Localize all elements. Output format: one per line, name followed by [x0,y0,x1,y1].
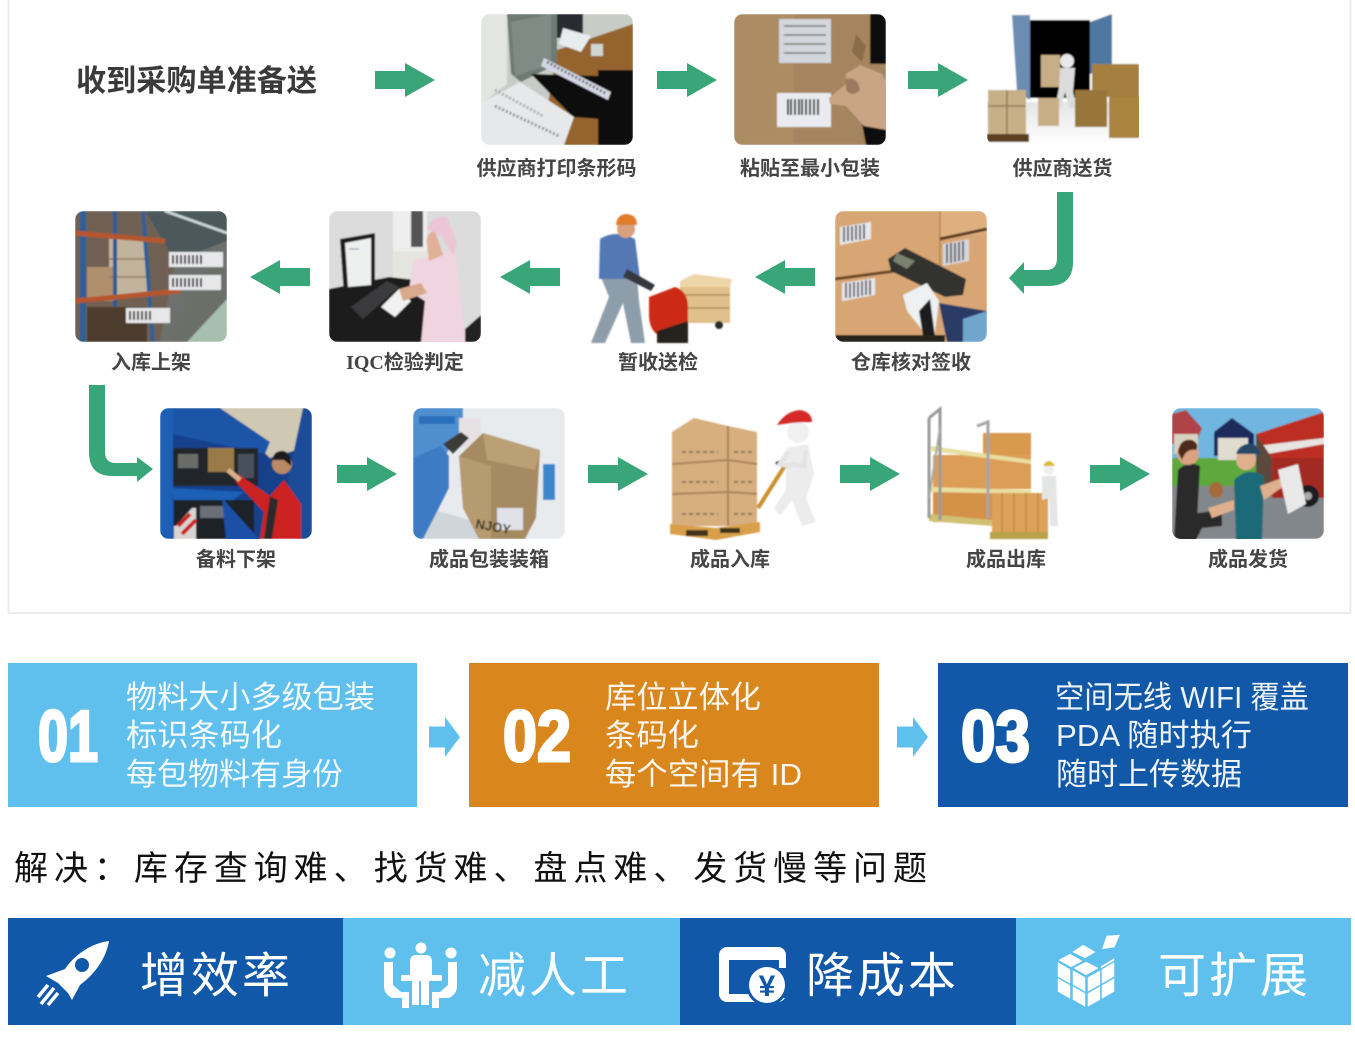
icon: rocket [38,941,109,1005]
number 01: 01 [38,697,98,777]
caption: label on smallest package: 粘贴至最小包装 [740,157,880,180]
text lines 01 [126,680,375,792]
photo: finished goods delivery [1172,408,1324,540]
arrow: step 12 to step 13 [1090,457,1150,491]
photo: supplier delivers goods [987,14,1140,145]
caption: temporary receipt and inspection: 暂收送检 [618,350,698,374]
label: 增效率 [140,950,290,1003]
panel: 03 wireless PDA [938,663,1348,807]
photo: pick materials from shelf [160,408,312,540]
arrow: step 1 to step 2 [657,63,717,97]
arrow: step 5 to step 6 [755,260,815,294]
illustration: worker with pallet truck [591,214,732,343]
panel: 02 location coding [469,663,879,807]
arrow: 01 to 02 [429,717,460,757]
photo: supplier prints barcodes [481,14,633,145]
text lines 02: 条码化 [605,718,699,753]
panel: process flow [8,0,1350,613]
icon: people at table [384,942,457,1008]
text lines 03: 空间无线 WIFI 覆盖 [1055,680,1309,715]
photo: finished goods packing [413,408,565,539]
icon: wallet with yen coin [719,947,788,1006]
caption: finished goods into storage: 成品入库 [690,547,770,571]
arrow: step 6 to step 7 [500,260,560,294]
text lines 02: 库位立体化 [605,680,761,715]
text lines 01: 标识条码化 [126,718,282,753]
icon: wallet with yen coin: ¥ [759,970,776,1003]
photo: label on smallest package [734,14,887,145]
caption: finished goods out of storage: 成品出库 [966,547,1046,571]
arrow: step 7 to step 8 [250,260,310,294]
panel: reduce labour [343,918,680,1025]
caption: supplier prints barcodes: 供应商打印条形码 [476,156,636,180]
arrow: curved from row 2 down to row 3 [89,385,153,482]
arrow: step 11 to step 12 [840,457,900,491]
text lines 01: 每包物料有身份 [126,757,343,792]
illustration: finished goods into storage [670,410,816,540]
caption: supplier delivers goods: 供应商送货 [1012,156,1112,180]
text lines 03: 随时上传数据 [1056,757,1242,792]
panel: lower cost [680,918,1016,1025]
caption: finished goods delivery: 成品发货 [1208,547,1288,571]
icon: cube [1057,934,1121,1008]
caption: IQC inspection: IQC检验判定 [346,350,464,374]
arrow: step 9 to step 10 [337,457,397,491]
caption: warehouse checks and signs: 仓库核对签收 [851,350,971,374]
illustration: finished goods out of storage [929,409,1058,539]
arrow: step 2 to step 3 [908,63,968,97]
text lines 03 [1055,680,1309,792]
panel: scalable [1016,918,1351,1025]
arrow: step 10 to step 11 [588,457,648,491]
photo: warehouse checks and signs [835,211,987,342]
number 02: 02 [503,697,571,777]
number 03: 03 [961,697,1030,777]
panel: increase efficiency [8,918,343,1025]
text: problems solved: 解决：库存查询难、找货难、盘点难、发货慢等问题 [14,850,927,888]
photo: finished goods packing: NJOY [474,516,512,537]
photo: IQC inspection [329,211,481,343]
caption: pick materials: 备料下架 [196,548,276,571]
caption: put on shelf: 入库上架 [111,351,191,374]
text lines 03: PDA 随时执行 [1056,718,1252,753]
label: 降成本 [806,950,956,1003]
title: receive purchase order: 收到采购单准备送 [76,65,317,98]
label: 减人工 [478,950,628,1003]
panel: 01 barcode labelling [8,663,417,807]
photo: warehouse racking [75,211,227,342]
text lines 02: 每个空间有 ID [605,757,802,792]
caption: finished goods packing: 成品包装装箱 [429,547,549,571]
text lines 02 [605,680,802,792]
arrow: 02 to 03 [897,717,928,757]
label: 可扩展 [1158,950,1308,1003]
arrow: curved from row 1 down to row 2 [1009,192,1073,294]
arrow: title to step 1 [375,63,435,97]
text lines 01: 物料大小多级包装 [126,680,375,715]
